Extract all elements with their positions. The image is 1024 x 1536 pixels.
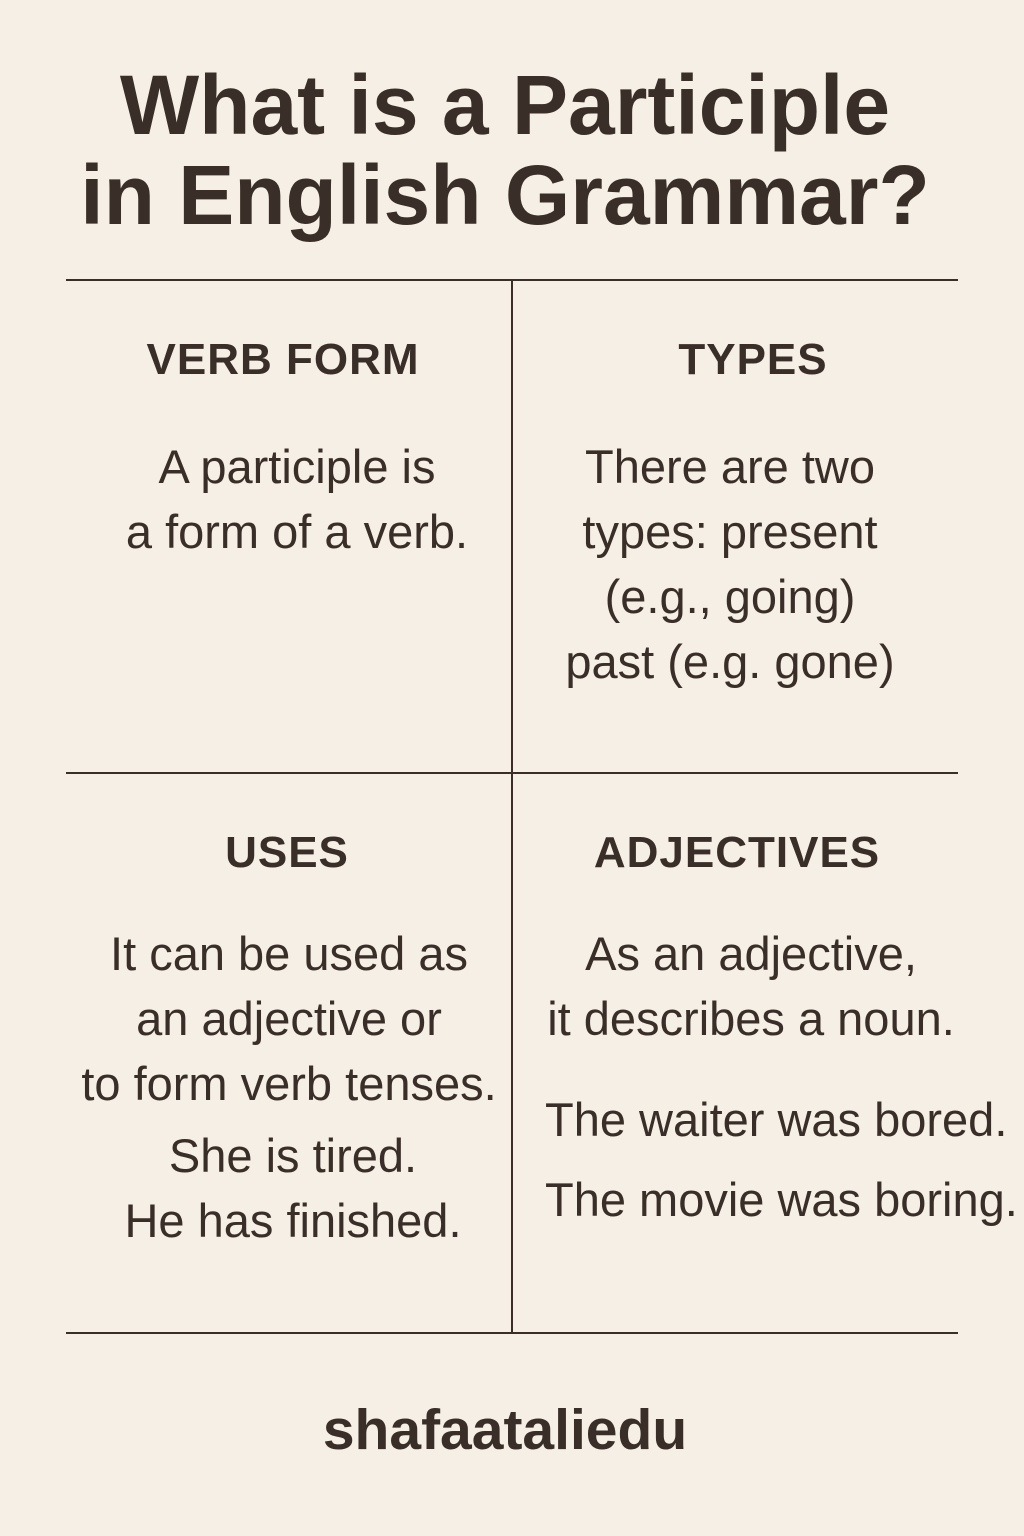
examples: adjectives [545,1093,1018,1226]
text: uses [81,927,497,1110]
examples: uses: He has finished. [124,1194,462,1247]
text: types: past (e.g. gone) [565,635,895,688]
examples: adjectives: The movie was boring. [545,1173,1018,1226]
title: What is a Participle [120,58,890,152]
title [80,58,930,242]
panel: verb form [126,335,468,558]
title: in English Grammar? [80,148,930,242]
text: adjectives [547,927,955,1045]
text: types [565,440,895,688]
heading: adjectives: ADJECTIVES [594,828,880,877]
examples: uses [124,1129,462,1247]
footer: shafaataliedu [323,1398,687,1462]
text: verb form [126,440,468,558]
text: uses: to form verb tenses. [81,1057,497,1110]
text: uses: It can be used as [110,927,468,980]
text: uses: an adjective or [136,992,442,1045]
text: types: types: present [582,505,878,558]
text: adjectives: As an adjective, [585,927,917,980]
text: verb form: A participle is [159,440,435,493]
text: types: There are two [585,440,875,493]
panel: adjectives [545,828,1018,1226]
heading: types: TYPES [678,335,828,384]
heading: verb form: VERB FORM [146,335,420,384]
text: verb form: a form of a verb. [126,505,468,558]
text: adjectives: it describes a noun. [547,992,955,1045]
panel: types [565,335,895,688]
examples: uses: She is tired. [169,1129,417,1182]
text: types: (e.g., going) [605,570,855,623]
examples: adjectives: The waiter was bored. [545,1093,1007,1146]
panel: uses [81,828,497,1247]
heading: uses: USES [225,828,349,877]
